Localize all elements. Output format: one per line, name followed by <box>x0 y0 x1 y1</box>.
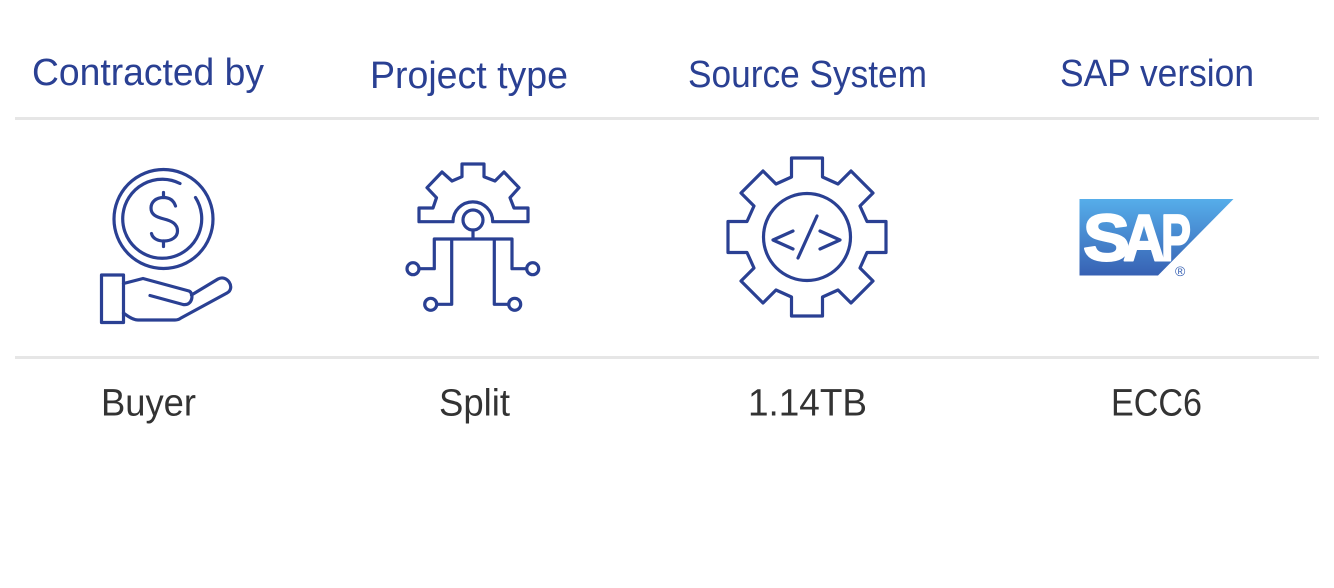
logo: SAP <box>1080 199 1234 279</box>
value: Split: Split <box>439 382 510 424</box>
value: 1.14TB: 1.14TB <box>748 382 867 424</box>
icon: hand holding coin <box>102 170 231 322</box>
icon: gear with circuit <box>407 164 539 310</box>
logo: SAP: P <box>1161 200 1191 274</box>
value: ECC6: ECC6 <box>1111 382 1202 424</box>
value: Buyer: Buyer <box>101 382 196 424</box>
icon: gear with code symbol <box>728 158 886 316</box>
logo: SAP: ® <box>1175 263 1186 279</box>
heading: Project type: Project type <box>370 55 568 97</box>
heading: Source System: Source System <box>688 54 927 96</box>
heading: SAP version: SAP version <box>1060 53 1254 95</box>
logo: SAP: S <box>1083 200 1130 274</box>
logo: SAP: A <box>1123 200 1165 274</box>
heading: Contracted by: Contracted by <box>32 52 264 94</box>
